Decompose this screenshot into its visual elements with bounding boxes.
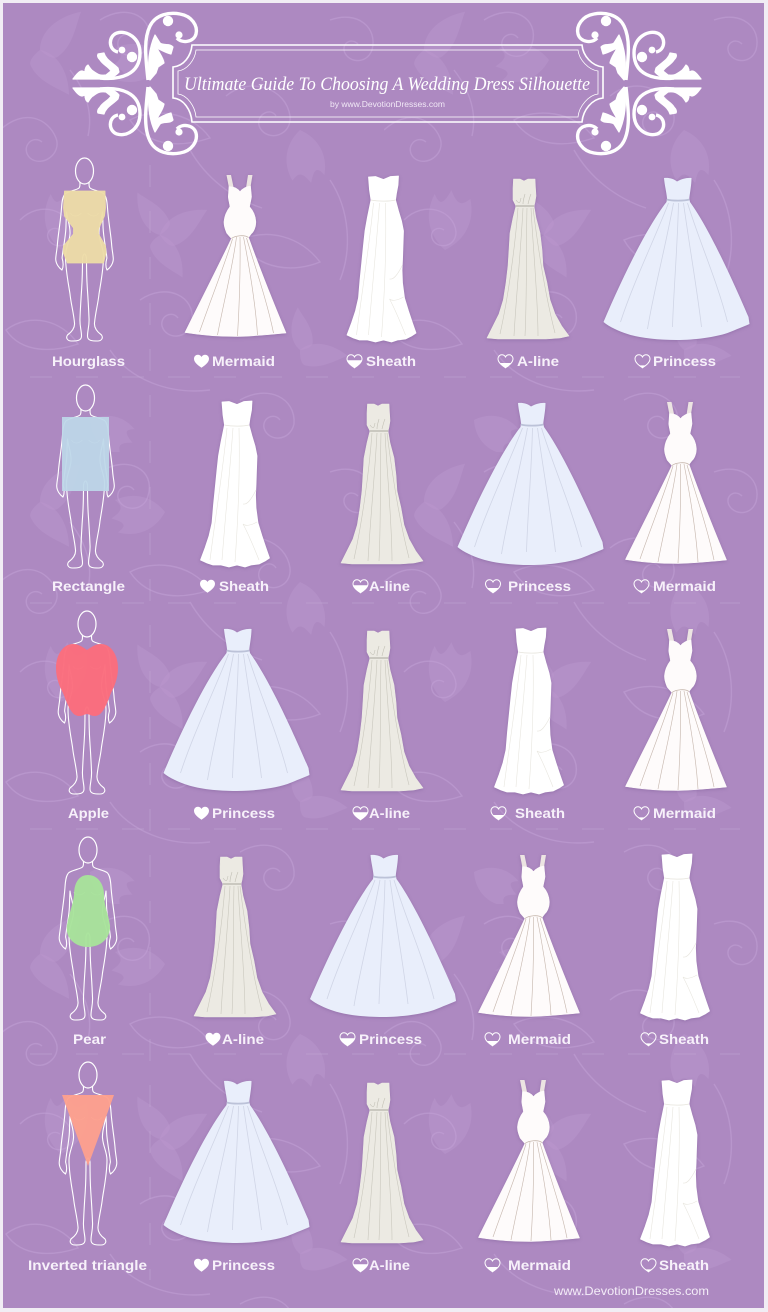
label: Rectangle: Rectangle: [52, 578, 125, 594]
dress: princess: [604, 178, 750, 340]
dress: A-line: [341, 631, 423, 791]
rating: Princess: [486, 578, 571, 594]
rating: Mermaid: Mermaid: [212, 353, 275, 369]
rating: Princess: Princess: [359, 1031, 422, 1047]
body figure: inverted triangle: [59, 1062, 117, 1245]
rating: Sheath: [491, 805, 565, 821]
dress: princess: [310, 855, 456, 1017]
dress: sheath: [494, 628, 564, 794]
rating: Sheath: Sheath: [659, 1257, 709, 1273]
label: Inverted triangle: Inverted triangle: [28, 1257, 147, 1273]
rating: A-line: A-line: [369, 805, 410, 821]
row: apple: [56, 611, 726, 821]
row: pear: [59, 837, 709, 1047]
rating: Mermaid: Mermaid: [653, 578, 716, 594]
rating: Mermaid: [485, 1257, 571, 1273]
rating: A-line: [498, 353, 559, 369]
rating: Sheath: Sheath: [515, 805, 565, 821]
header banner: [73, 13, 701, 154]
rating: A-line: A-line: [369, 578, 410, 594]
rating: A-line: [206, 1031, 264, 1047]
title: Ultimate Guide To Choosing A Wedding Dress Silhouette: [184, 74, 590, 95]
body figure: rectangle: [57, 385, 114, 568]
body figure: pear: [59, 837, 117, 1020]
body figure: apple: [56, 611, 118, 794]
rating: A-line: A-line: [369, 1257, 410, 1273]
body figure: hourglass: [56, 158, 113, 341]
dress: sheath: [640, 854, 710, 1020]
label: Pear: Pear: [73, 1031, 107, 1047]
rating: Sheath: [347, 353, 416, 369]
dress: A-line: [341, 1083, 423, 1243]
dress: mermaid: [626, 402, 726, 564]
dress: A-line: [487, 179, 569, 339]
rating: A-line: [353, 805, 410, 821]
dress: sheath: [640, 1080, 710, 1246]
dress: princess: [458, 403, 604, 565]
rating: Mermaid: Mermaid: [508, 1257, 571, 1273]
row: hourglass: [52, 158, 750, 369]
footer url: www.DevotionDresses.com: [553, 1284, 709, 1298]
dress: princess: [164, 1081, 310, 1243]
rating: A-line: A-line: [222, 1031, 264, 1047]
dress: mermaid: [478, 855, 580, 1016]
rating: A-line: [353, 578, 410, 594]
row: rectangle: [52, 385, 726, 594]
rating: A-line: A-line: [517, 353, 559, 369]
rating: Princess: Princess: [508, 578, 571, 594]
dress: sheath: [347, 176, 416, 342]
dress: A-line: [341, 404, 423, 564]
rating: Sheath: Sheath: [219, 578, 269, 594]
rating: A-line: [353, 1257, 410, 1273]
rating: Sheath: [200, 578, 269, 594]
label: Apple: Apple: [68, 805, 109, 821]
label: Hourglass: Hourglass: [52, 353, 125, 369]
rating: Sheath: [641, 1257, 709, 1273]
rating: Sheath: Sheath: [659, 1031, 709, 1047]
row: inverted triangle: [28, 1062, 710, 1273]
rating: Mermaid: Mermaid: [653, 805, 716, 821]
rating: Sheath: [641, 1031, 709, 1047]
title frame: [173, 45, 603, 122]
dress: sheath: [200, 401, 270, 567]
rating: Princess: Princess: [212, 805, 275, 821]
rating: Sheath: Sheath: [366, 353, 416, 369]
rating: Mermaid: [485, 1031, 571, 1047]
dress: mermaid: [185, 175, 286, 336]
dress: mermaid: [478, 1080, 580, 1242]
dress: mermaid: [626, 629, 726, 790]
rating: Princess: Princess: [212, 1257, 275, 1273]
ornament: corner flourishes: [73, 13, 701, 154]
dress: A-line: [194, 857, 276, 1017]
rating: Mermaid: Mermaid: [508, 1031, 571, 1047]
dress: princess: [164, 629, 310, 791]
subtitle: by www.DevotionDresses.com: [330, 100, 445, 109]
rating: Princess: Princess: [653, 353, 716, 369]
